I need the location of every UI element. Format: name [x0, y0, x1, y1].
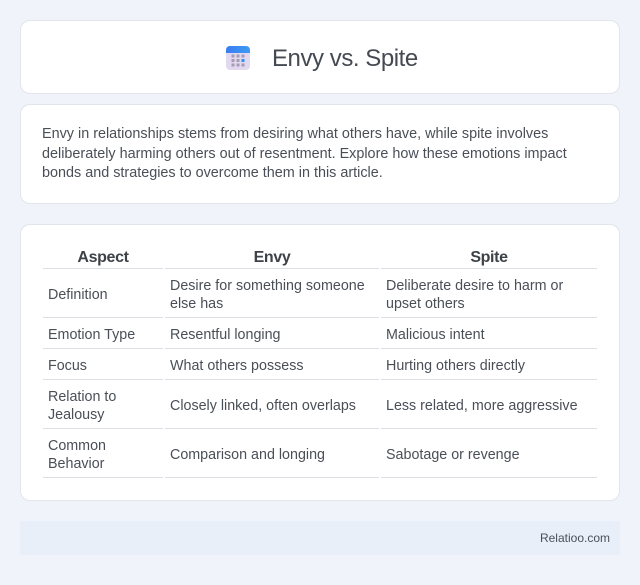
- row: relation to jealousy: Less related, more aggressive: [386, 398, 578, 414]
- row: common behavior: Common: [48, 438, 106, 454]
- text block: introduction: Envy in relationships stems from desiring what others have, while spite involves: [42, 126, 548, 142]
- footer bar: [20, 521, 620, 555]
- row: focus: [48, 358, 525, 374]
- table header: Aspect: [77, 249, 129, 266]
- panel: introduction: [20, 104, 620, 204]
- footer credit: Relatioo.com: [540, 531, 610, 545]
- row: relation to jealousy: Closely linked, often overlaps: [170, 398, 356, 414]
- row: definition: Desire for something someone: [170, 278, 365, 294]
- text block: introduction: [42, 126, 567, 181]
- row: definition: else has: [170, 296, 223, 312]
- row: relation to jealousy: Jealousy: [48, 407, 104, 423]
- row: common behavior: [48, 438, 520, 472]
- row: relation to jealousy: Relation to: [48, 389, 116, 405]
- row: focus: Hurting others directly: [386, 358, 525, 374]
- row: definition: upset others: [386, 296, 465, 312]
- row: common behavior: Sabotage or revenge: [386, 447, 520, 463]
- row: emotion type: [48, 327, 485, 343]
- table header: [77, 249, 508, 266]
- panel: title card: [20, 20, 620, 94]
- row: emotion type: Malicious intent: [386, 327, 485, 343]
- row: definition: [48, 278, 564, 312]
- text block: introduction: deliberately harming others out of resentment. Explore how these emotions impact: [42, 146, 567, 162]
- row: focus: Focus: [48, 358, 87, 374]
- row: emotion type: Emotion Type: [48, 327, 135, 343]
- row: definition: Definition: [48, 287, 108, 303]
- text block: introduction: bonds and strategies to overcome them in this article.: [42, 165, 383, 181]
- row: definition: Deliberate desire to harm or: [386, 278, 563, 294]
- panel: comparison table: [20, 224, 620, 501]
- icon: calendar: [226, 46, 250, 70]
- table header: Spite: [470, 249, 508, 266]
- row: relation to jealousy: [48, 389, 578, 423]
- row: focus: What others possess: [170, 358, 304, 374]
- table header: Envy: [254, 249, 290, 266]
- row: common behavior: Behavior: [48, 456, 104, 472]
- comparison table: [43, 249, 597, 478]
- row: common behavior: Comparison and longing: [170, 447, 325, 463]
- row: emotion type: Resentful longing: [170, 327, 280, 343]
- title: Envy vs. Spite: [272, 45, 418, 72]
